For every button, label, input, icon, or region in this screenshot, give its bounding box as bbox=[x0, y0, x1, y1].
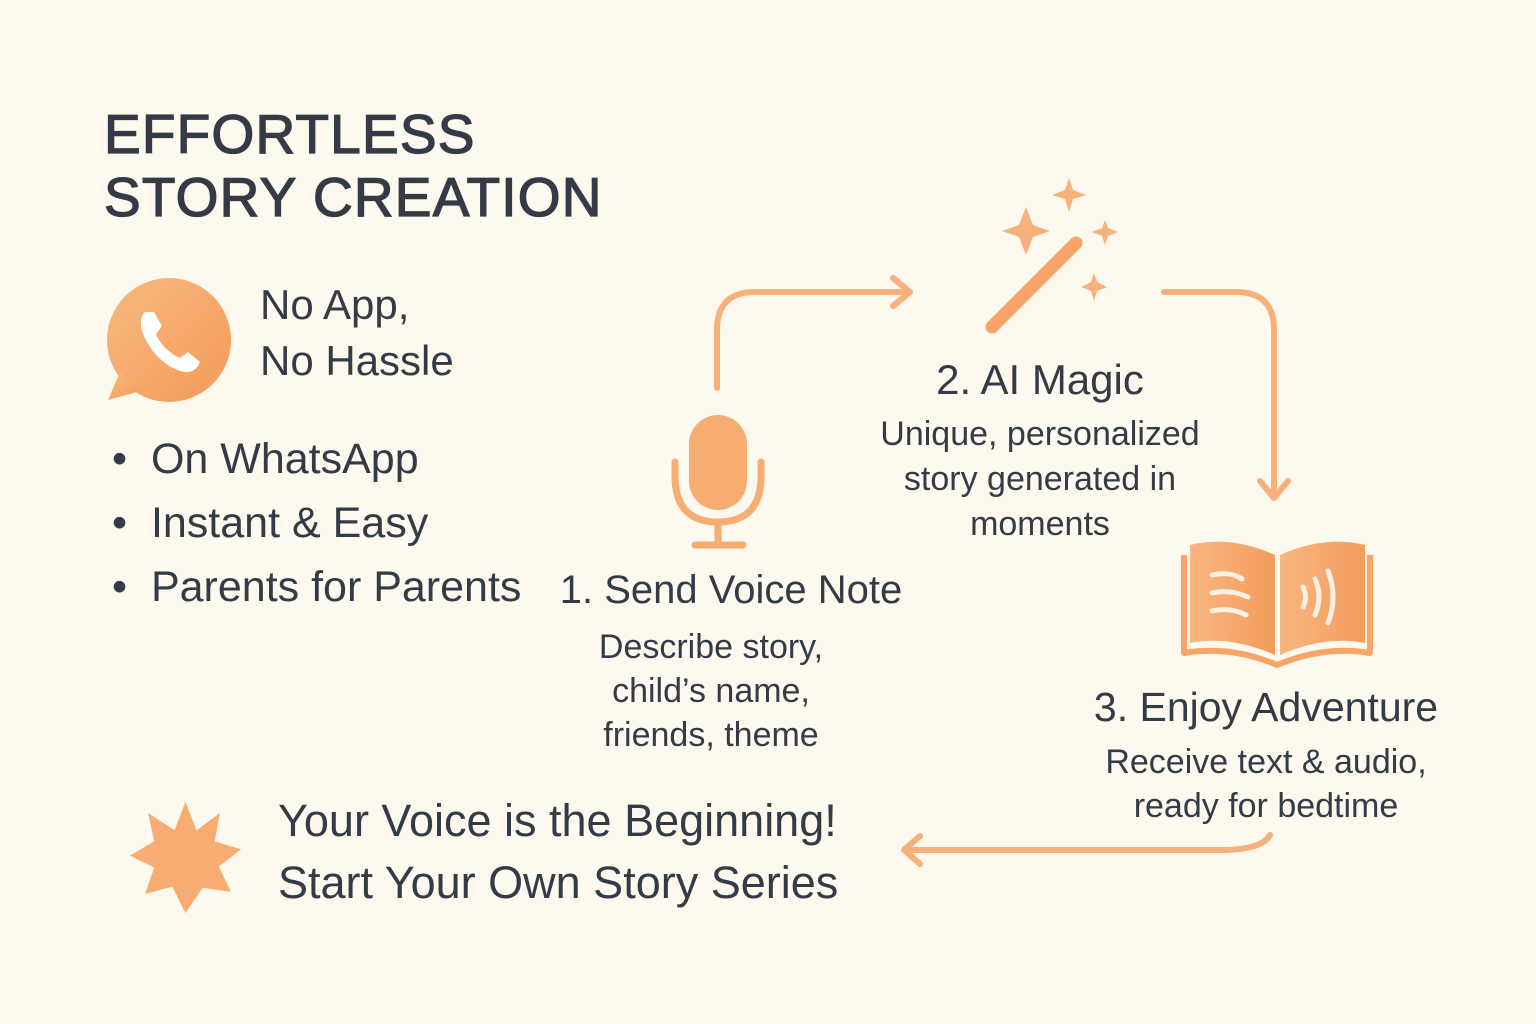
text: no app no hassle: No App, bbox=[260, 281, 409, 328]
text: no app no hassle: No Hassle bbox=[260, 337, 454, 384]
text: Receive text & audio, bbox=[1105, 743, 1427, 781]
text: moments bbox=[970, 505, 1110, 543]
bullet list: • Instant & Easy bbox=[112, 499, 428, 547]
bullet list: • Parents for Parents bbox=[112, 563, 521, 611]
icon: whatsapp bubble bbox=[107, 278, 231, 402]
text: child’s name, bbox=[612, 672, 810, 710]
text: no app no hassle bbox=[260, 281, 454, 384]
bullet list bbox=[112, 435, 521, 611]
text: story generated in bbox=[904, 460, 1176, 498]
icon: starburst bbox=[130, 802, 241, 913]
bullet list: • On WhatsApp bbox=[112, 435, 419, 483]
title: STORY CREATION bbox=[104, 166, 603, 228]
icon: magic wand bbox=[986, 178, 1118, 334]
step 1 text: 1. Send Voice Note bbox=[560, 568, 902, 612]
icon: open book bbox=[1181, 542, 1373, 668]
bottom callout text bbox=[278, 795, 838, 908]
text: friends, theme bbox=[603, 716, 819, 754]
text: ready for bedtime bbox=[1134, 787, 1398, 825]
title bbox=[104, 103, 603, 228]
text: Describe story, bbox=[599, 628, 823, 666]
step 3 text: 3. Enjoy Adventure bbox=[1094, 684, 1438, 730]
text: Unique, personalized bbox=[880, 415, 1200, 453]
title: EFFORTLESS bbox=[104, 103, 476, 165]
bottom callout text: Start Your Own Story Series bbox=[278, 857, 838, 908]
step 2 text: 2. AI Magic bbox=[936, 356, 1144, 403]
icon: microphone bbox=[672, 415, 764, 548]
bottom callout text: Your Voice is the Beginning! bbox=[278, 795, 837, 846]
